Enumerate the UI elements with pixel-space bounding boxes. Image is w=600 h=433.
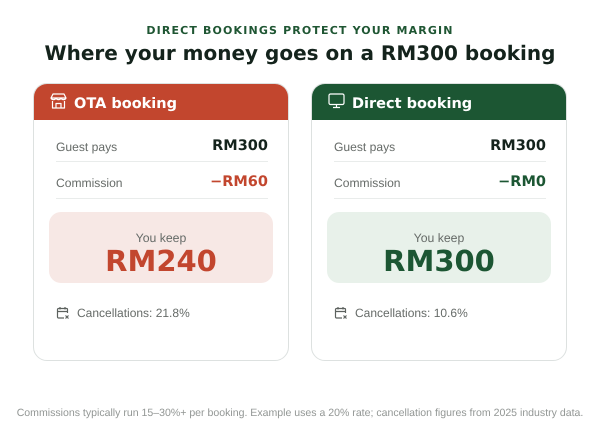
icon: monitor: [328, 93, 345, 108]
cancellations: [56, 306, 190, 320]
title: Where your money goes on a RM300 booking: [45, 41, 555, 65]
you keep amount: RM240: [105, 244, 217, 278]
you keep amount: RM300: [383, 244, 495, 278]
commission value: −RM0: [498, 174, 546, 190]
OTA header title: OTA booking: [74, 96, 177, 112]
icon: calendar cancel: [56, 307, 69, 319]
row: commission: [56, 161, 268, 199]
icon: calendar cancel: [334, 307, 347, 319]
panel: Direct booking: [311, 83, 567, 361]
row: commission: [334, 161, 546, 199]
OTA header: [33, 83, 289, 120]
Direct header title: Direct booking: [352, 96, 472, 112]
you keep label: You keep: [414, 230, 464, 244]
callout: you keep: [327, 212, 551, 283]
guest pays value: RM300: [490, 138, 546, 154]
cancellations: [334, 306, 468, 320]
footnote: Commissions typically run 15–30%+ per booking. Example uses a 20% rate; cancellation figures from 2025 industry data.: [17, 407, 583, 419]
commission label: Commission: [334, 176, 401, 190]
panel: OTA booking: [33, 83, 289, 361]
eyebrow heading: DIRECT BOOKINGS PROTECT YOUR MARGIN: [146, 24, 454, 37]
commission label: Commission: [56, 176, 123, 190]
guest pays label: Guest pays: [56, 140, 117, 154]
row: guest pays: [334, 124, 546, 162]
guest pays label: Guest pays: [334, 140, 395, 154]
you keep label: You keep: [136, 230, 186, 244]
guest pays value: RM300: [212, 138, 268, 154]
Direct header: [311, 83, 567, 120]
callout: you keep: [49, 212, 273, 283]
row: guest pays: [56, 124, 268, 162]
cancellations text: Cancellations: 21.8%: [77, 306, 190, 320]
cancellations text: Cancellations: 10.6%: [355, 306, 468, 320]
icon: storefront: [50, 93, 67, 109]
commission value: −RM60: [210, 174, 268, 190]
